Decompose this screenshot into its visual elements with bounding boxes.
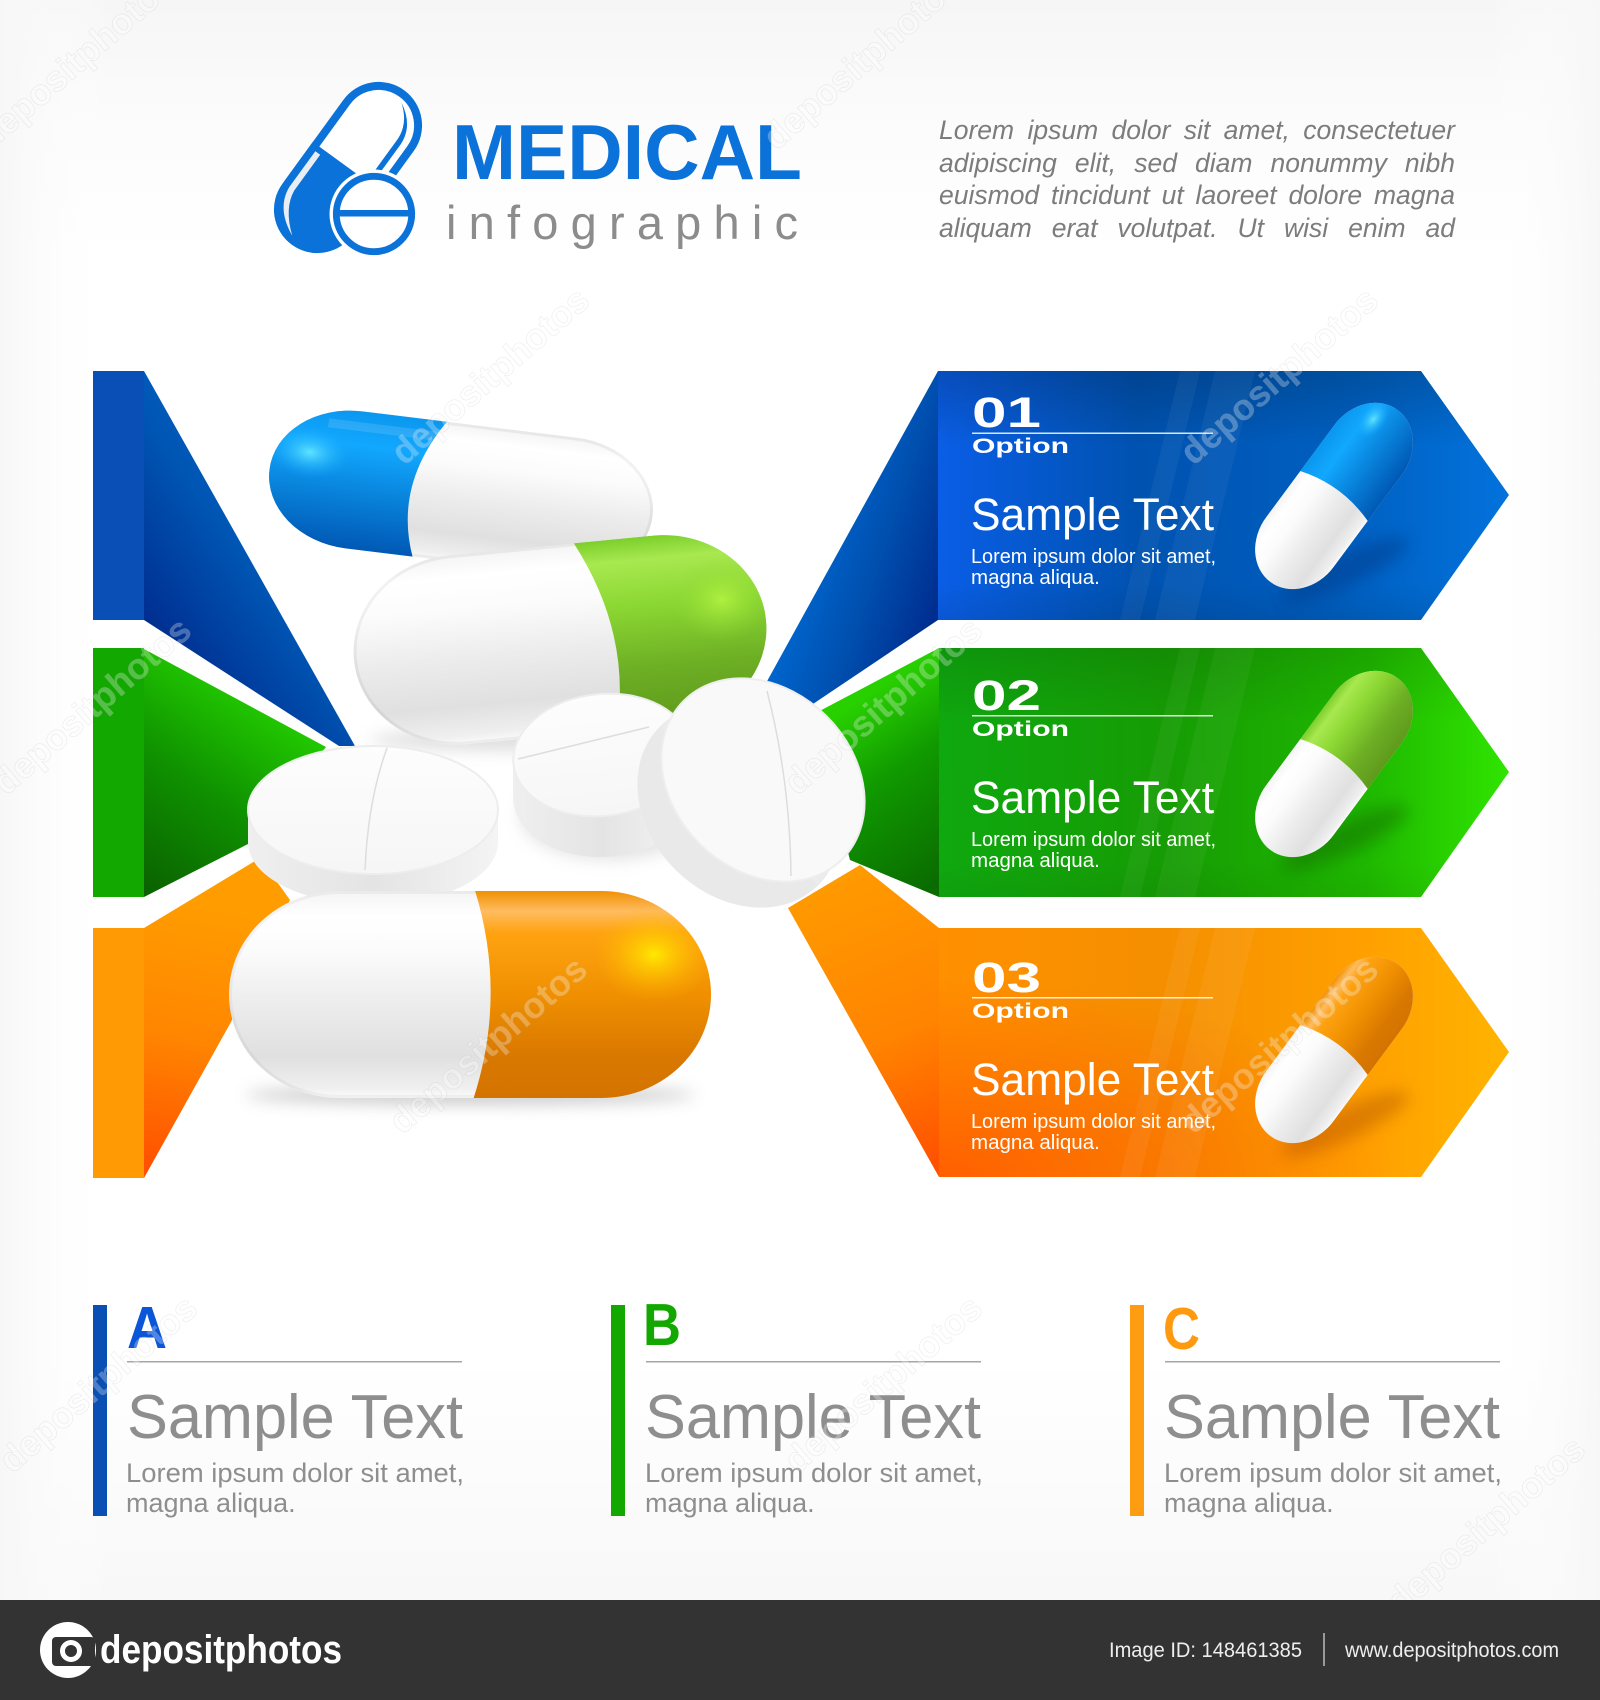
panel heading: Sample Text <box>971 1054 1214 1105</box>
green left fold <box>93 648 326 897</box>
option number: 01 <box>972 389 1041 437</box>
letter C: C <box>1163 1296 1200 1362</box>
panel text: magna aliqua. <box>971 1131 1100 1154</box>
text C <box>1164 1458 1502 1518</box>
subtitle: infographic: infographic <box>446 196 798 249</box>
heading A: Sample Text <box>127 1383 463 1452</box>
tablet: standing right <box>596 637 906 949</box>
option label: Option <box>972 1000 1069 1023</box>
icon: blue capsule <box>1255 402 1413 606</box>
watermarks: depositphotos <box>381 948 595 1141</box>
green and white capsule <box>354 535 766 744</box>
panel text: magna aliqua. <box>971 566 1100 589</box>
column C <box>1130 1296 1502 1518</box>
letter B: B <box>643 1292 681 1358</box>
panel text: Lorem ipsum dolor sit amet, <box>971 545 1216 568</box>
option number: 02 <box>972 672 1041 720</box>
panel text <box>971 1110 1216 1154</box>
column B <box>611 1292 983 1518</box>
left ribbon folds <box>93 371 355 1178</box>
right panel 01: blue arrow <box>760 371 1509 710</box>
panel text: magna aliqua. <box>971 849 1100 872</box>
orange and white capsule <box>229 890 716 1098</box>
icon: orange capsule <box>1255 956 1413 1162</box>
image id: Image ID: 148461385 <box>1109 1639 1302 1662</box>
text A: magna aliqua. <box>126 1488 296 1518</box>
text B: magna aliqua. <box>645 1488 815 1518</box>
header paragraph <box>939 115 1456 243</box>
shadow under orange capsule <box>245 1086 695 1104</box>
right panel 03: orange arrow <box>788 865 1509 1177</box>
right panel 02: green arrow <box>812 648 1509 897</box>
shadow below green capsule <box>370 730 670 750</box>
footer logo wordmark: depositphotos <box>100 1628 342 1672</box>
blue and white capsule <box>269 410 653 558</box>
watermarks: depositphotos <box>776 609 990 802</box>
central pile of pills <box>229 400 906 1104</box>
orange left fold <box>93 858 290 1178</box>
header paragraph: Lorem ipsum dolor sit amet, consectetuer <box>939 115 1455 145</box>
text A: Lorem ipsum dolor sit amet, <box>126 1458 464 1488</box>
option label: Option <box>972 435 1069 458</box>
footer bar <box>0 1600 1600 1700</box>
panel heading: Sample Text <box>971 772 1214 823</box>
tablet: left <box>248 746 498 905</box>
column A <box>93 1295 464 1518</box>
text C: magna aliqua. <box>1164 1488 1334 1518</box>
header paragraph: euismod tincidunt ut laoreet dolore magna <box>939 180 1455 210</box>
panel text: Lorem ipsum dolor sit amet, <box>971 828 1216 851</box>
letter A: A <box>127 1295 167 1361</box>
panel text: Lorem ipsum dolor sit amet, <box>971 1110 1216 1133</box>
text A <box>126 1458 464 1518</box>
watermarks: depositphotos <box>776 1287 990 1480</box>
title: MEDICAL: MEDICAL <box>452 108 802 196</box>
option number: 03 <box>972 954 1041 1002</box>
watermarks: depositphotos <box>1379 1428 1593 1621</box>
text C: Lorem ipsum dolor sit amet, <box>1164 1458 1502 1488</box>
panel heading: Sample Text <box>971 489 1214 540</box>
watermarks: depositphotos <box>1172 279 1386 472</box>
heading C: Sample Text <box>1164 1383 1500 1452</box>
header paragraph: aliquam erat volutpat. Ut wisi enim ad <box>939 213 1455 243</box>
watermarks: depositphotos <box>383 279 597 472</box>
panel text <box>971 545 1216 589</box>
website: www.depositphotos.com <box>1344 1639 1559 1662</box>
footer logo icon <box>40 1622 96 1678</box>
panel text <box>971 828 1216 872</box>
text B <box>645 1458 983 1518</box>
header paragraph: adipiscing elit, sed diam nonummy nibh <box>939 148 1455 178</box>
heading B: Sample Text <box>645 1383 981 1452</box>
blue left fold <box>93 371 355 746</box>
icon: green capsule <box>1255 670 1413 875</box>
text B: Lorem ipsum dolor sit amet, <box>645 1458 983 1488</box>
tablet: middle <box>507 685 700 860</box>
watermarks: depositphotos <box>1172 948 1386 1141</box>
logo: capsule and tablet icon <box>259 68 437 267</box>
option label: Option <box>972 718 1069 741</box>
